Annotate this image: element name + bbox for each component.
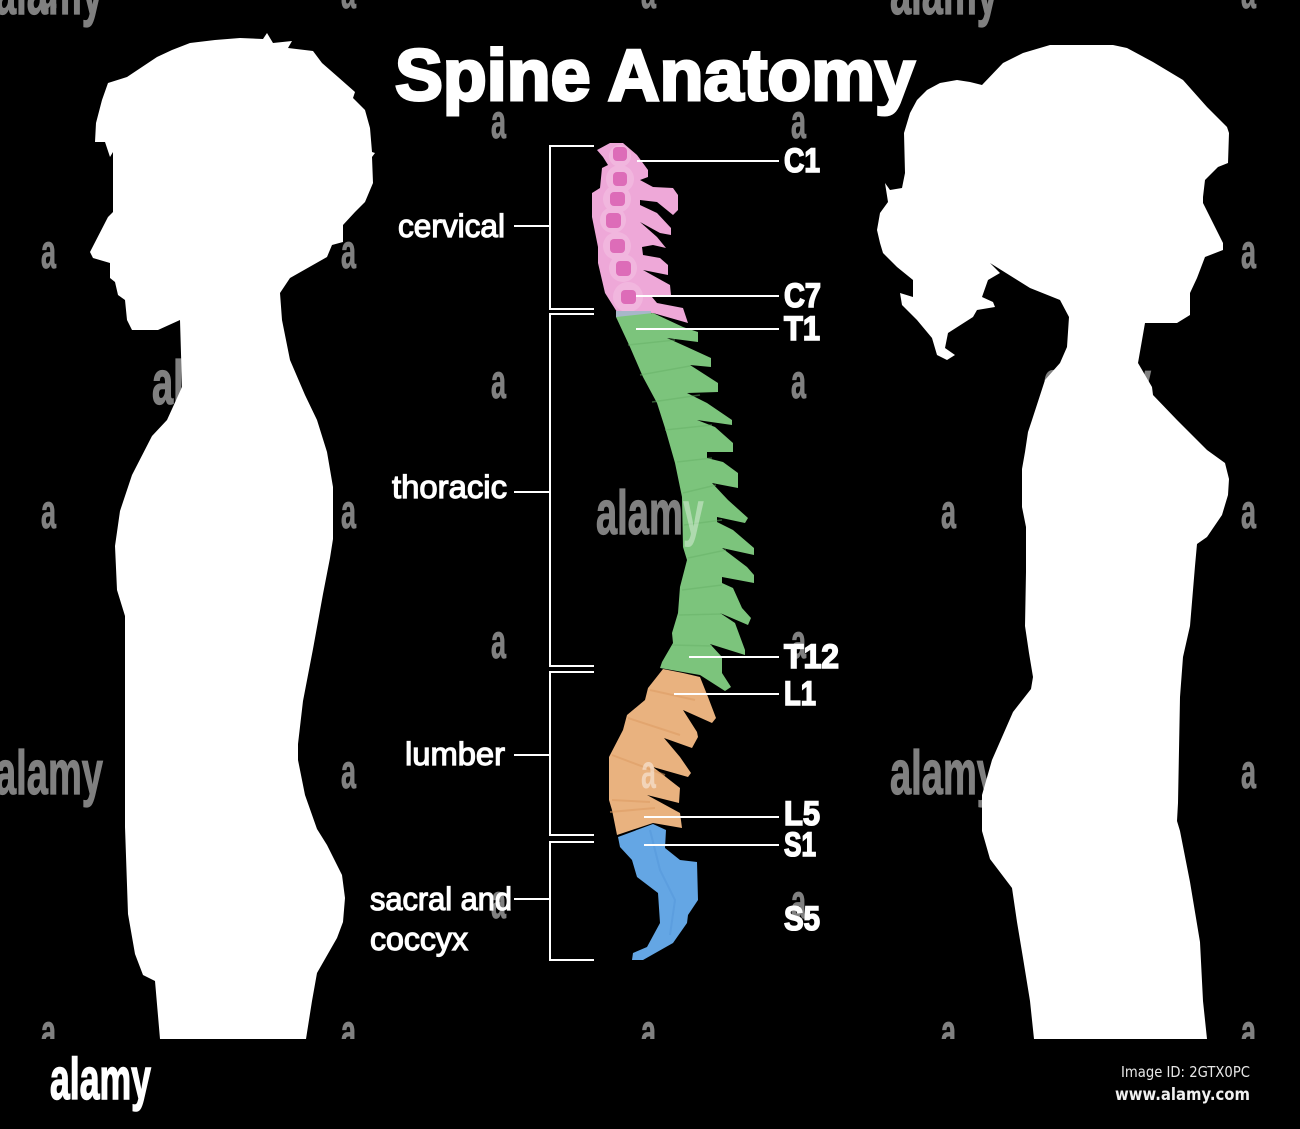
label: sacral and coccyx: sacral and [370,881,512,917]
cervical vertebrae (pink) [592,143,688,323]
vertebra labels: C7 [784,277,821,315]
watermark pattern: alamy [152,349,260,418]
watermark pattern: a [641,746,656,799]
vertebra labels: T12 [784,638,839,676]
label: lumber: lumber [405,736,505,772]
watermark pattern: a [491,616,506,669]
brackets grouping spine regions [514,146,594,960]
watermark pattern: alamy [1043,349,1151,418]
bracket: lumbar [514,672,594,835]
spine illustration [592,143,754,960]
vertebra labels: L5 [784,795,820,833]
watermark overlay on lumbar: a [641,746,656,799]
title: Spine Anatomy [395,36,915,116]
watermark pattern: alamy [0,739,103,808]
watermark pattern: a [41,486,56,539]
watermark pattern: alamy [596,479,704,548]
bracket: thoracic [514,314,594,666]
watermark pattern: a [791,356,806,409]
image id: Image ID: 2GTX0PC [1121,1063,1250,1081]
watermark pattern: a [1241,486,1256,539]
junction band between cervical and thoracic [616,311,651,317]
lumbar vertebrae (orange) [609,669,716,835]
watermark pattern: a [491,356,506,409]
watermark pattern: a [41,226,56,279]
watermark pattern: a [1241,746,1256,799]
label: thoracic: thoracic [392,469,507,505]
watermark pattern: a [791,96,806,149]
silhouette: female body in profile [877,45,1229,1039]
vertebra labels: L1 [784,675,816,713]
watermark pattern: a [491,96,506,149]
website: www.alamy.com [1115,1085,1250,1105]
leader lines to vertebrae [636,161,779,845]
watermark pattern: alamy [890,739,998,808]
sacrum and coccyx (blue) [618,824,698,960]
thoracic vertebrae (green) [616,313,754,691]
watermark pattern: a [791,616,806,669]
vertebra labels: T1 [784,310,820,348]
watermark pattern: a [341,486,356,539]
bracket: sacral and coccyx [514,842,594,960]
silhouette: male body in profile [90,33,375,1039]
watermark pattern: a [941,1006,956,1059]
vertebra labels: C1 [784,142,820,180]
watermark pattern: a [641,1006,656,1059]
vertebra labels [784,142,839,938]
label: sacral and coccyx: coccyx [370,921,468,957]
watermark pattern: a [1241,226,1256,279]
watermark pattern: a [41,1006,56,1059]
vertebra labels: S5 [784,900,820,938]
label: sacral and coccyx [370,881,512,957]
vertebra labels: S1 [784,826,816,864]
watermark pattern: a [1241,1006,1256,1059]
watermark pattern: a [341,226,356,279]
watermark pattern: a [341,746,356,799]
bracket: cervical [514,146,594,309]
label: cervical: cervical [398,208,505,244]
watermark pattern: a [491,876,506,929]
region labels [370,208,512,957]
watermark pattern: a [791,876,806,929]
watermark pattern: a [341,1006,356,1059]
alamy logo: alamy [50,1047,151,1112]
watermark overlay on spine: alamy [596,479,704,548]
watermark pattern: a [941,486,956,539]
